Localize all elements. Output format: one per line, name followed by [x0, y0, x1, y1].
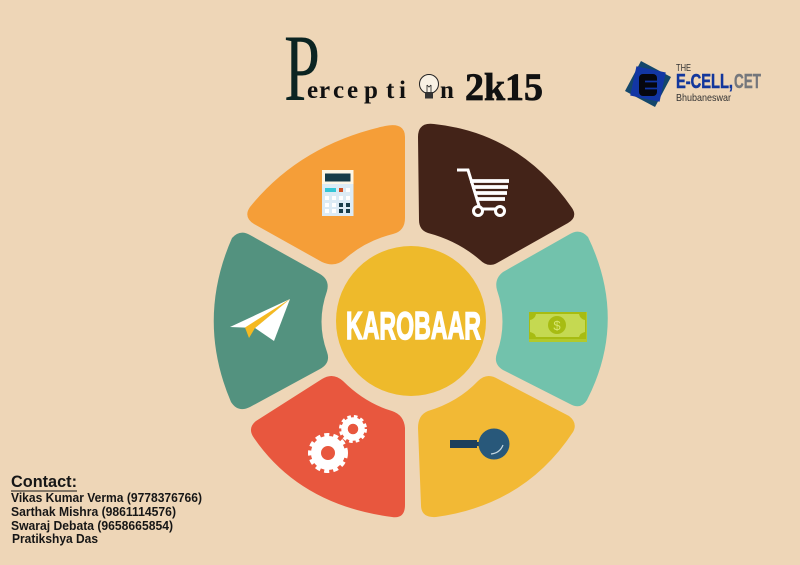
orange panel: [247, 125, 405, 264]
icon: banknote: [529, 312, 587, 342]
icon: gears: [310, 416, 366, 471]
contact: Pratikshya Das: Pratikshya Das: [12, 532, 98, 546]
red panel: [251, 376, 405, 517]
logo text: Bhubaneswar: Bhubaneswar: [676, 92, 731, 104]
contact: Swaraj Debata: Swaraj Debata (9658665854): [11, 519, 173, 533]
brown panel: [418, 124, 574, 265]
logo text: CET: CET: [734, 71, 761, 93]
contact underline: [11, 490, 77, 492]
icon: magnifying glass: [450, 428, 510, 460]
contact: Vikas Kumar Verma: Vikas Kumar Verma (9778376766): [11, 491, 202, 505]
dollar sign: $: [553, 318, 561, 333]
logo: E-Cell CET: [625, 61, 761, 107]
icon: light bulb: [420, 74, 438, 98]
yellow panel: [418, 376, 575, 517]
icon: shopping cart: [457, 170, 509, 216]
contact heading: Contact:: [11, 473, 77, 491]
contact block: [11, 473, 202, 546]
segment: orange with calculator: [247, 125, 405, 264]
center circle: Karobaar: [336, 246, 486, 396]
yellow hub: [336, 246, 486, 396]
teal panel: [496, 232, 608, 406]
green panel: [214, 233, 328, 409]
word: erception: erceptin: [307, 77, 454, 104]
segment: red with gears: [251, 376, 405, 517]
segment: yellow with magnifier: [418, 376, 575, 517]
large initial P: P: [284, 15, 320, 121]
contact: Sarthak Mishra: Sarthak Mishra (9861114576): [11, 505, 176, 519]
logo text: THE: THE: [676, 63, 691, 74]
icon: paper plane: [230, 299, 290, 341]
title: Perception 2k15: [284, 15, 543, 121]
year: 2k15: 2k15: [465, 66, 543, 109]
logo mark: [625, 61, 671, 107]
hub label: KAROBAAR: [346, 305, 481, 348]
icon: calculator: [322, 170, 354, 216]
logo text: E-CELL,: E-CELL,: [676, 71, 733, 93]
segment: green with paper plane: [214, 233, 328, 409]
segment: teal with banknote: [496, 232, 608, 406]
segment: brown with cart: [418, 124, 574, 265]
